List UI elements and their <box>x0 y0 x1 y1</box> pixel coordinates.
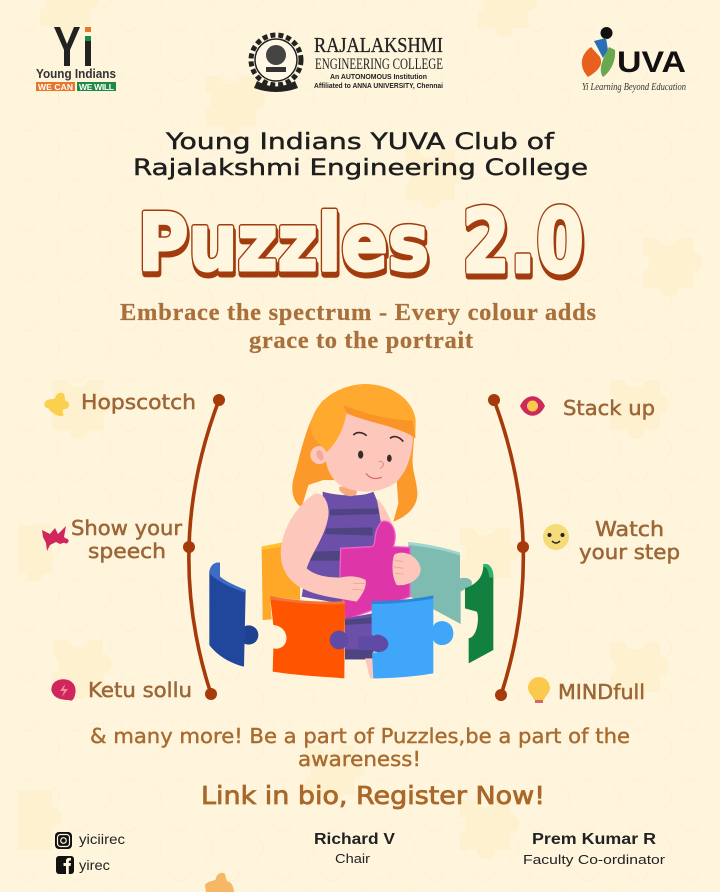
icon: facebook <box>56 856 74 874</box>
icon: red brain <box>51 679 76 701</box>
hair back <box>292 400 417 522</box>
icon: red splat <box>42 526 69 551</box>
icon: smiley <box>543 524 569 550</box>
legs <box>365 658 373 678</box>
title: Puzzles 2.0: 2.0 <box>462 190 584 293</box>
purple tab right <box>358 635 388 652</box>
blue puzzle piece <box>372 595 453 678</box>
icon: yellow puzzle blob <box>44 393 69 416</box>
signatory: faculty co-ordinator: Faculty Co-ordinator <box>523 852 666 867</box>
red-orange puzzle piece <box>270 596 345 678</box>
label: Ketu sollu: Ketu sollu <box>88 678 192 702</box>
signatory: chair: Richard V <box>314 831 395 848</box>
logo: Rajalakshmi Engineering College: An AUTONOMOUS Institution <box>330 72 427 81</box>
call to action text: awareness! <box>298 747 421 771</box>
dress <box>302 492 393 603</box>
label: MINDfull: MINDfull <box>558 680 645 704</box>
label: Show your speech <box>71 516 183 563</box>
icon: instagram <box>55 832 72 849</box>
face and ear <box>310 408 413 492</box>
logo: YUVA <box>582 27 686 93</box>
logo: Rajalakshmi Engineering College: RAJALAKSHMI <box>314 33 443 57</box>
label: Show your speech: Show your <box>71 516 183 540</box>
skirt <box>345 613 373 659</box>
magenta puzzle piece <box>340 521 410 620</box>
purple tab <box>330 631 348 649</box>
title: Puzzles 2.0: Puzzles <box>139 203 430 293</box>
title: Puzzles 2.0: Puzzles <box>138 199 429 289</box>
signatory: faculty co-ordinator: Prem Kumar R <box>532 831 656 848</box>
green puzzle piece <box>465 564 493 663</box>
heading: organiser: Rajalakshmi Engineering College <box>133 156 588 181</box>
icon: light bulb <box>528 677 550 703</box>
call to action text: & many more! Be a part of Puzzles,be a part of the <box>90 724 630 748</box>
right hand <box>392 553 421 585</box>
illustration: girl with puzzle pieces <box>209 384 493 678</box>
icon: bottom orange puzzle <box>205 873 234 892</box>
signatory: faculty co-ordinator <box>523 831 666 867</box>
label: Hopscotch: Hopscotch <box>81 390 196 414</box>
label: Show your speech: speech <box>88 539 166 563</box>
logo: Young Indians <box>36 27 116 92</box>
tagline: Embrace the spectrum - Every colour adds <box>120 299 596 326</box>
call to action text <box>90 724 630 771</box>
logo: YUVA: Yi Learning Beyond Education <box>582 82 686 93</box>
icon: eye <box>520 396 545 416</box>
title: Puzzles 2.0 <box>138 190 585 297</box>
tagline <box>120 299 596 354</box>
social handles: yirec <box>79 857 110 873</box>
heading: organiser: Young Indians YUVA Club of <box>165 130 556 155</box>
dark blue puzzle piece <box>209 563 258 667</box>
logo: Rajalakshmi Engineering College <box>251 33 443 92</box>
label: Stack up: Stack up <box>563 396 655 420</box>
logo: YUVA: UVA <box>617 46 686 79</box>
logo: Young Indians: WE CAN <box>38 82 73 92</box>
yellow puzzle piece <box>262 543 300 620</box>
title: Puzzles 2.0: 2.0 <box>462 190 584 293</box>
hair top <box>311 384 416 452</box>
left arc <box>183 394 225 700</box>
logo: Rajalakshmi Engineering College: Affiliated to ANNA UNIVERSITY, Chennai <box>314 83 443 90</box>
signatory: chair <box>314 831 395 866</box>
signatory: chair: Chair <box>335 851 371 866</box>
logo: Young Indians: Young Indians <box>36 67 116 81</box>
label: Watch your step: your step <box>579 540 680 564</box>
left hand <box>328 576 366 602</box>
heading: organiser <box>133 130 588 181</box>
teal puzzle piece <box>408 542 472 624</box>
social handles: yiciirec <box>79 831 125 847</box>
right arc <box>488 394 529 701</box>
register heading: Link in bio, Register Now! <box>201 781 545 810</box>
label: Watch your step: Watch <box>595 517 664 541</box>
social handles <box>55 831 125 874</box>
logo: Young Indians: WE WILL <box>79 82 114 92</box>
logo: Rajalakshmi Engineering College: ENGINEERING COLLEGE <box>315 56 443 73</box>
left arm <box>281 493 366 602</box>
title: Puzzles 2.0: Puzzles <box>138 199 429 289</box>
neck <box>339 487 357 496</box>
label: Watch your step <box>579 517 680 564</box>
tagline: grace to the portrait <box>249 327 474 354</box>
right shoulder <box>377 498 394 530</box>
title: Puzzles 2.0: 2.0 <box>463 194 585 297</box>
